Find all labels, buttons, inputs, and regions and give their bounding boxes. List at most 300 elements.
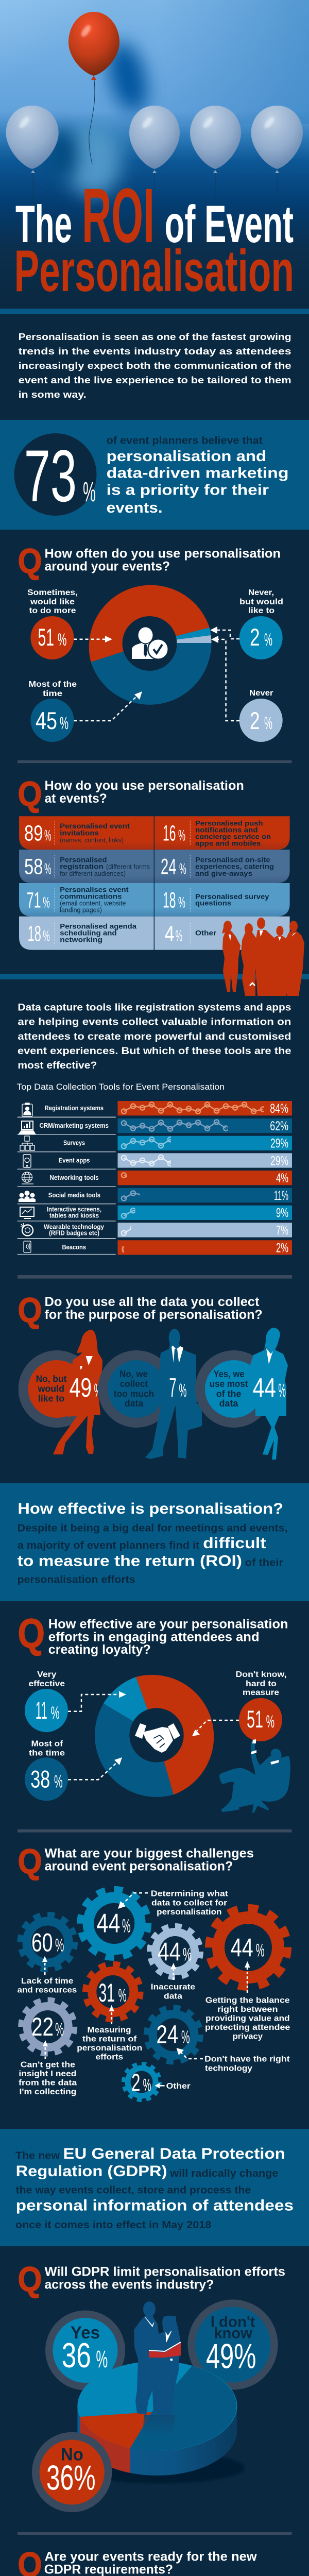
blue balloon 4 (251, 106, 303, 214)
icon: monitor (20, 1207, 35, 1219)
intro paragraph: in some way. (19, 389, 87, 400)
row 2 right: 24 (161, 855, 176, 879)
gear: measuring return 31%: efforts (96, 2053, 123, 2062)
row 4 left: % (43, 928, 50, 945)
gear: determining what data 44%: Determining what (151, 1890, 228, 1899)
intro paragraph: trends in the events industry today as attendees (19, 346, 291, 357)
gear: determining what data 44%: % (122, 1916, 131, 1937)
GDPR answer: yes 36%: Yes (71, 2323, 100, 2343)
row 3 left: landing pages) (60, 907, 102, 914)
bar: beacons 2% (62, 1240, 292, 1255)
bar: surveys 29% (63, 1136, 292, 1151)
intro paragraph: Personalisation is seen as one of the fastest growing (19, 331, 291, 342)
callout: never but would like to 2% (239, 588, 283, 659)
row 4 left: 18 (28, 922, 41, 946)
callout: sometimes 51%: to do more (29, 606, 76, 615)
callout: most of the time 38%: Most of (31, 1739, 63, 1748)
question 6 heading (18, 2260, 285, 2299)
row 1 right: 16 (163, 821, 176, 846)
gear: lack of time 60%: % (55, 1936, 64, 1956)
gear: inaccurate data 44%: 44 (158, 1938, 181, 1967)
bar: interactive screens 9%: Interactive screens, (47, 1206, 101, 1213)
gear: measuring return 31%: the return of (82, 2035, 137, 2044)
row 2 right: Personalised on-site (195, 856, 270, 863)
data use: no we collect too much data 7%: collect (120, 1379, 148, 1389)
divider (18, 760, 291, 763)
data use: no but would like to 49%: No, but (36, 1374, 66, 1384)
red balloon (68, 12, 119, 164)
bar: social media tools 11%: 11% (274, 1189, 288, 1203)
title: The (15, 195, 72, 253)
callout: never but would like to 2%: like to (248, 606, 274, 615)
gear: measuring return 31% (77, 1964, 142, 2062)
gear: balance value and privacy 44% (205, 1909, 290, 2041)
callout: sometimes 51%: 51 (38, 623, 54, 651)
callout: sometimes 51% (27, 588, 78, 659)
callout: most of the time 38% (25, 1739, 68, 1801)
gear: wrong technology 24%: Don't have the right (204, 2055, 290, 2064)
arrows: donut callouts (74, 626, 239, 721)
divider (18, 2532, 291, 2535)
intro paragraph (19, 331, 291, 400)
callout: most of the time 38%: % (54, 1772, 63, 1791)
data use: yes we use most of the data 44%: data (219, 1398, 238, 1409)
divider (18, 1829, 291, 1833)
bar: event apps 29%: 29% (270, 1154, 288, 1168)
bar: interactive screens 9%: tables and kiosks (49, 1212, 99, 1219)
GDPR answer: yes 36% (45, 2310, 125, 2391)
question 3 heading (18, 1291, 263, 1330)
gear: can't get insight 22%: insight I need (19, 2070, 76, 2078)
question 6 heading: Will GDPR limit personalisation efforts (44, 2264, 285, 2279)
row 1 left (24, 821, 130, 846)
data use: no we collect too much data 7%: data (125, 1398, 144, 1409)
row 4 right: 4 (165, 922, 175, 946)
callout: very effective 11%: effective (29, 1680, 65, 1688)
row 3 right: 18 (163, 888, 176, 913)
icon: laptop (18, 1121, 36, 1134)
73% statement: is a priority for their (107, 482, 269, 499)
arrows: effectiveness callouts (68, 1691, 239, 1780)
row 2 left: registration (60, 863, 104, 871)
blue rule under title (0, 309, 309, 314)
hero: balloons photo (0, 0, 309, 309)
question 1 heading: Q (18, 541, 42, 581)
data use: no we collect too much data 7%: 7 (169, 1373, 176, 1403)
gear: wrong technology 24%: 24 (157, 2020, 178, 2049)
bar: registration systems 84%: 84% (270, 1101, 288, 1116)
GDPR text: Regulation (GDPR) (16, 2163, 167, 2180)
73% statement: data-driven marketing (107, 465, 289, 482)
paragraph: data capture tools: Data capture tools like registration systems and apps (18, 1002, 291, 1013)
question 1 heading: around your events? (44, 560, 170, 574)
paragraph: data capture tools: attendees to create more powerful and customised (18, 1031, 291, 1042)
gear: lack of time 60%: and resources (18, 1986, 77, 1994)
row 3 right (163, 888, 269, 913)
callout: never 2%: Never (249, 689, 273, 698)
question 4 heading (18, 1611, 288, 1657)
data use: no we collect too much data 7%: No, we (119, 1369, 148, 1379)
GDPR answer: I don't know 49% (187, 2299, 278, 2390)
row 2 left: (different forms (106, 863, 150, 871)
row 1 right: concierge service on (195, 833, 271, 841)
blue rule behind figures (0, 974, 309, 979)
GDPR answer: I don't know 49%: know (214, 2325, 253, 2342)
callout: most of the time 45%: 45 (36, 707, 57, 734)
73% statement: personalisation and (107, 448, 266, 465)
icon: org chart (20, 1136, 35, 1150)
question 6 heading: Q (18, 2260, 42, 2299)
gear: can't get insight 22% (19, 2000, 77, 2096)
callout: most of the time 45%: time (43, 689, 62, 698)
gear: lack of time 60%: 60 (31, 1928, 53, 1957)
row 3 left: 71 (27, 888, 41, 913)
row 3 left: (email content, website (60, 900, 126, 907)
data use: no but would like to 49%: 49 (70, 1373, 92, 1403)
gear: balance value and privacy 44%: privacy (233, 2032, 263, 2041)
title (14, 172, 294, 304)
73% statement: events. (107, 500, 163, 516)
band body text: a majority of event planners find it (18, 1540, 200, 1551)
gear: can't get insight 22%: % (55, 2020, 64, 2040)
row 1 left: % (44, 827, 52, 844)
gear: determining what data 44%: personalisation (157, 1908, 221, 1917)
data use: yes we use most of the data 44% (195, 1328, 288, 1460)
bar: CRM 62%: CRM/marketing systems (39, 1122, 109, 1129)
icon: people (19, 1191, 36, 1202)
divider (18, 1275, 292, 1279)
blue balloon 2 (129, 106, 180, 191)
row 3 right: Personalised survey (195, 893, 269, 901)
question 2 heading (18, 774, 244, 814)
question 7 heading (18, 2545, 257, 2576)
data use: no we collect too much data 7% (98, 1329, 202, 1459)
callout: don't know 51%: measure (243, 1688, 279, 1697)
GDPR text: the way events collect, store and process the (16, 2185, 251, 2196)
bar: event apps 29%: Event apps (59, 1157, 90, 1164)
gear: lack of time 60% (18, 1915, 77, 1994)
row 1 right: apps and mobiles (195, 840, 261, 848)
figures: group of red people (222, 918, 304, 996)
callout: most of the time 38%: the time (29, 1749, 65, 1757)
panel: 73% stat band (0, 420, 309, 530)
question 2 heading: at events? (44, 791, 107, 806)
callout: very effective 11%: 11 (36, 1697, 47, 1724)
gear: other 2%: % (143, 2075, 151, 2095)
gear: other 2%: Other (166, 2082, 191, 2091)
bar: surveys 29%: 29% (270, 1137, 288, 1151)
callout: don't know 51%: Don't know, (236, 1670, 286, 1679)
bar: CRM 62% (39, 1118, 292, 1133)
row 3 left: % (43, 894, 50, 911)
callout: most of the time 45%: Most of the (29, 680, 77, 689)
icon: handshake (135, 1723, 180, 1753)
question 5 heading: What are your biggest challenges (44, 1846, 254, 1861)
gear: wrong technology 24%: technology (205, 2064, 252, 2073)
bar: social media tools 11%: Social media tools (48, 1192, 100, 1199)
callout: most of the time 45%: % (60, 714, 68, 733)
separators (18, 1117, 116, 1239)
gear: lack of time 60%: Lack of time (21, 1977, 74, 1986)
panel: GDPR intro band (0, 2129, 309, 2246)
gear: measuring return 31%: % (118, 1986, 127, 2006)
row 1 right: Personalised push (195, 820, 263, 827)
callout: very effective 11% (25, 1670, 68, 1732)
row 4 left: Personalised agenda (60, 922, 137, 930)
question 5 heading: Q (18, 1842, 42, 1881)
silhouette: woman cyan (250, 1328, 288, 1460)
row 4 right: Other (195, 929, 217, 937)
row 1 right: notifications and (195, 826, 258, 834)
73% badge: 73 (24, 435, 77, 517)
bar: beacons 2%: 2% (276, 1241, 288, 1255)
gear: other 2% (124, 2064, 191, 2100)
data use: no we collect too much data 7%: too much (114, 1388, 154, 1399)
GDPR answer: I don't know 49%: I don't (211, 2314, 255, 2331)
GDPR answer: no 36%: 36% (46, 2458, 96, 2497)
row 2 left: for different audiences) (60, 870, 126, 877)
gear: wrong technology 24%: % (181, 2027, 190, 2047)
band body text: to measure the return (ROI) (18, 1552, 242, 1569)
bar: interactive screens 9% (47, 1206, 292, 1221)
callout: don't know 51%: 51 (247, 1705, 263, 1733)
silhouette: man blue (145, 1329, 202, 1459)
row 1 right (163, 820, 271, 848)
data use: no but would like to 49%: like to (38, 1394, 64, 1404)
73% statement: of event planners believe that (107, 435, 263, 447)
bar: wearable technology 7%: Wearable technology (44, 1224, 104, 1231)
gear: measuring return 31%: Measuring (88, 2026, 131, 2035)
callout: sometimes 51%: would like (30, 598, 75, 606)
data use: yes we use most of the data 44%: use most (210, 1379, 248, 1389)
callout: sometimes 51%: Sometimes, (27, 588, 78, 597)
callout: sometimes 51%: % (58, 630, 66, 650)
icon: phone (23, 1155, 31, 1167)
callout: never but would like to 2%: % (264, 630, 272, 650)
question 3 heading: for the purpose of personalisation? (44, 1308, 263, 1322)
GDPR text: personal information of attendees (16, 2197, 294, 2214)
callout: never but would like to 2%: Never, (248, 588, 274, 597)
row 2 left: % (44, 861, 52, 878)
gear: balance value and privacy 44%: Getting the balance (205, 1996, 290, 2005)
GDPR text: will radically change (169, 2168, 278, 2179)
gear: measuring return 31%: personalisation (77, 2044, 142, 2053)
gear: measuring return 31%: 31 (98, 1978, 115, 2007)
bar: networking tools 4%: 4% (276, 1171, 288, 1185)
paragraph: data capture tools: are helping events collect valuable information on (18, 1016, 291, 1028)
gear: balance value and privacy 44%: protecting attendee (205, 2023, 290, 2032)
donut chart: usage frequency (89, 585, 211, 705)
data use: no but would like to 49% (19, 1330, 102, 1454)
question 5 heading (18, 1842, 254, 1881)
data use: no but would like to 49%: % (94, 1380, 102, 1401)
question 6 heading: across the events industry? (44, 2277, 214, 2292)
bar: networking tools 4%: Networking tools (49, 1174, 99, 1181)
row backgrounds (19, 816, 290, 950)
73% statement (107, 435, 289, 516)
row 2 left: 58 (24, 855, 43, 879)
row 1 left: invitations (60, 829, 99, 837)
icon: person with check (132, 628, 169, 660)
band body text: of their (245, 1557, 283, 1568)
bar: CRM 62%: 62% (270, 1119, 288, 1133)
row 4 left: scheduling and (60, 929, 117, 937)
gear: determining what data 44%: 44 (97, 1909, 121, 1939)
data use: yes we use most of the data 44%: 44 (253, 1373, 276, 1403)
bar: registration systems 84%: Registration systems (44, 1105, 104, 1112)
callout: never 2%: 2 (250, 707, 260, 734)
donut chart: effectiveness (95, 1675, 214, 1797)
callout: most of the time 38%: 38 (30, 1765, 50, 1792)
figures: couple with book (134, 2301, 181, 2437)
callout: very effective 11%: % (51, 1703, 60, 1723)
question 2 heading: Q (18, 774, 42, 814)
GDPR text (15, 2145, 294, 2231)
data use: yes we use most of the data 44%: % (278, 1380, 286, 1401)
paragraph: data capture tools: most effective? (18, 1060, 97, 1071)
question 5 heading: around event personalisation? (44, 1859, 233, 1874)
row 3 left: Personalises event (60, 886, 129, 894)
data use: yes we use most of the data 44%: of the (216, 1388, 241, 1399)
gear: balance value and privacy 44%: 44 (231, 1934, 253, 1962)
bar chart: data collection tools (18, 1101, 292, 1255)
callout: never but would like to 2%: but would (239, 598, 283, 606)
gear: balance value and privacy 44%: right between (217, 2005, 278, 2014)
3D pie chart (75, 2301, 245, 2483)
GDPR text: once it comes into effect in May 2018 (15, 2219, 211, 2231)
row 3 left (27, 886, 129, 914)
data use: no but would like to 49%: would (38, 1384, 64, 1394)
row 2 right: % (179, 861, 186, 878)
question 1 heading: How often do you use personalisation (44, 547, 281, 561)
question 3 heading: Do you use all the data you collect (44, 1295, 260, 1309)
blue balloon 3 (190, 106, 241, 206)
question 4 heading: How effective are your personalisation (48, 1617, 288, 1632)
question 4 heading: Q (18, 1611, 45, 1656)
bar: interactive screens 9%: 9% (276, 1206, 288, 1221)
GDPR answer: yes 36%: % (96, 2345, 108, 2372)
gear: inaccurate data 44%: Inaccurate (151, 1983, 195, 1992)
callout: very effective 11%: Very (37, 1670, 57, 1679)
band body text: personalisation efforts (18, 1574, 135, 1586)
panel: how effective is personalisation (0, 1483, 309, 1601)
icon: target (21, 1223, 33, 1235)
gear: inaccurate data 44%: data (164, 1992, 182, 2001)
row 3 right: questions (195, 900, 231, 907)
bar: networking tools 4% (49, 1171, 292, 1185)
row 3 left: communications (60, 893, 122, 901)
gear: wrong technology 24% (147, 2008, 290, 2073)
bar: wearable technology 7%: 7% (276, 1223, 288, 1238)
row 1 left: (names, content, links) (60, 837, 124, 844)
gear: determining what data 44% (81, 1890, 228, 1957)
bar: event apps 29% (59, 1153, 292, 1168)
GDPR text: The new (15, 2150, 60, 2162)
row 4 right: % (176, 928, 182, 945)
73% badge: % (83, 477, 96, 507)
row 2 left (24, 855, 150, 879)
gear: can't get insight 22%: Can't get the (21, 2061, 75, 2070)
callout: never 2% (239, 689, 283, 742)
icon: globe (22, 1172, 33, 1184)
gear: can't get insight 22%: 22 (31, 2012, 54, 2041)
band body text: Despite it being a big deal for meetings and events, (18, 1523, 288, 1534)
question 7 heading: Are your events ready for the new (44, 2550, 257, 2564)
bar: wearable technology 7% (44, 1223, 292, 1238)
band body text: difficult (203, 1535, 266, 1552)
row 3 right: % (178, 894, 185, 911)
bar: social media tools 11% (48, 1188, 292, 1203)
row 1 right: % (178, 827, 185, 844)
gear: balance value and privacy 44%: % (256, 1941, 265, 1961)
row 1 left: Personalised event (60, 822, 130, 830)
callout: most of the time 45% (29, 680, 77, 742)
question 4 heading: efforts in engaging attendees and (48, 1630, 260, 1645)
band heading: How effective is personalisation? (18, 1500, 283, 1517)
callout: don't know 51%: hard to (246, 1680, 277, 1688)
GDPR text: EU General Data Protection (63, 2145, 285, 2162)
table: uses of personalisation (19, 816, 290, 950)
GDPR answer: no 36% (32, 2432, 112, 2512)
icon: clipboard (22, 1103, 32, 1116)
chart title: Top Data Collection Tools for Event Personalisation (16, 1082, 225, 1092)
intro paragraph: event and the live experience to be tailored to them (19, 375, 291, 385)
blue balloon 1 (6, 106, 59, 242)
band body text (18, 1523, 288, 1586)
bar: registration systems 84% (44, 1101, 292, 1116)
gear: other 2%: 2 (131, 2069, 140, 2096)
bar: wearable technology 7%: (RFID badges etc) (49, 1229, 99, 1236)
gear: inaccurate data 44% (149, 1926, 201, 2001)
GDPR answer: no 36%: No (61, 2445, 83, 2465)
callout: never but would like to 2%: 2 (250, 623, 260, 651)
gear: can't get insight 22%: from the data (19, 2079, 77, 2088)
gear: balance value and privacy 44%: providing value and (205, 2014, 290, 2023)
GDPR answer: I don't know 49%: 49% (206, 2337, 256, 2376)
bar: beacons 2%: Beacons (62, 1244, 86, 1251)
question 2 heading: How do you use personalisation (44, 778, 244, 793)
title: ROI (82, 172, 154, 259)
row 4 left (28, 922, 137, 946)
data use: no we collect too much data 7%: % (179, 1380, 186, 1401)
row 4 right (165, 922, 217, 946)
gear: can't get insight 22%: I'm collecting (20, 2088, 76, 2096)
silhouette: woman red (53, 1330, 102, 1454)
callout: don't know 51% (236, 1670, 286, 1765)
paragraph: data capture tools (18, 1002, 291, 1071)
row 1 left: 89 (24, 821, 43, 846)
question 4 heading: creating loyalty? (48, 1642, 151, 1657)
callout: never 2%: % (264, 714, 272, 733)
icon: beacon phone (24, 1241, 31, 1252)
intro paragraph: increasingly expect both the communication of the (19, 360, 291, 371)
row 2 left: Personalised (60, 856, 107, 863)
figure: seated man balancing bubble (219, 1739, 290, 1813)
callout: don't know 51%: % (266, 1712, 274, 1732)
question 3 heading: Q (18, 1291, 42, 1330)
row 4 left: networking (60, 936, 102, 943)
paragraph: data capture tools: event experiences. But which of these tools are the (18, 1045, 291, 1057)
gear: determining what data 44%: data to collect for (151, 1899, 227, 1907)
GDPR answer: yes 36%: 36 (62, 2336, 91, 2375)
bar: surveys 29%: Surveys (63, 1140, 85, 1147)
row 2 right: experiences, catering (195, 863, 274, 871)
gear: inaccurate data 44%: % (183, 1945, 192, 1965)
row 2 right (161, 855, 274, 879)
row 2 right: and give-aways (195, 870, 252, 877)
question 1 heading (18, 541, 281, 581)
data use: yes we use most of the data 44%: Yes, we (213, 1369, 244, 1379)
